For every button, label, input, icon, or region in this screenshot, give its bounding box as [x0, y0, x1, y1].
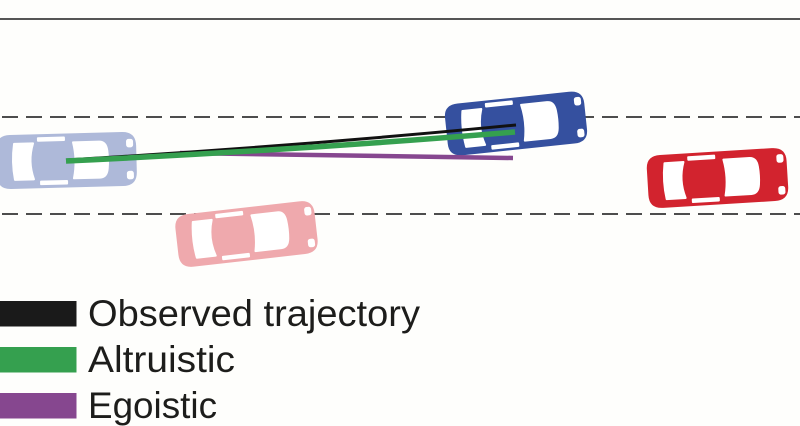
legend label: egoistic: Egoistic: [88, 385, 217, 426]
car: red, leading vehicle: [646, 147, 789, 209]
legend swatch: observed trajectory: [0, 301, 76, 326]
legend swatch: egoistic: [0, 393, 76, 418]
car: faded red, other vehicle: [174, 200, 319, 268]
legend: [0, 293, 421, 426]
legend label: altruistic: Altruistic: [88, 339, 235, 380]
trajectory: observed: [66, 125, 516, 160]
top road boundary: [0, 18, 800, 20]
car: faded blue, start position: [0, 132, 137, 189]
car: blue, current position: [444, 90, 588, 157]
lane dashed line: upper: [2, 116, 800, 118]
legend swatch: altruistic: [0, 347, 76, 372]
trajectory: altruistic: [66, 132, 515, 161]
lane dashed line: lower: [2, 213, 800, 215]
trajectory: egoistic: [180, 153, 513, 158]
legend label: observed trajectory: Observed trajectory: [88, 293, 421, 334]
